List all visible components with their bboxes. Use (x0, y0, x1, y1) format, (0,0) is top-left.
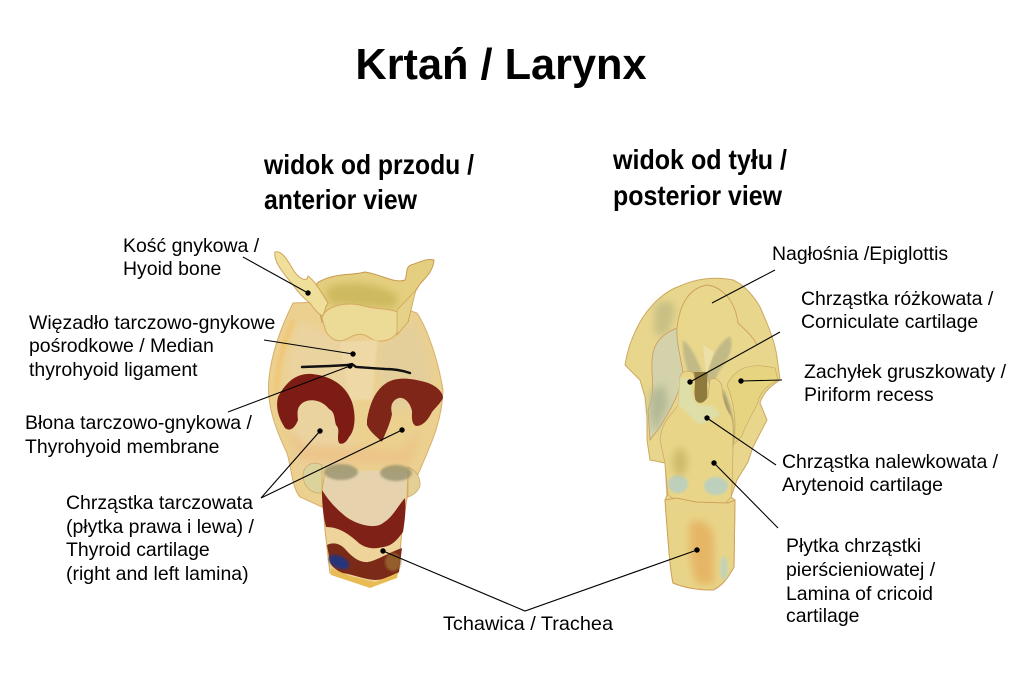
label: thyroid cartilage: (right and left lamina) (66, 563, 249, 585)
cricoid and trachea (322, 464, 412, 588)
epiglottis (678, 285, 757, 352)
illustration: anterior larynx (268, 252, 443, 588)
arytenoid and cricoid upper body (660, 371, 733, 504)
left fold region (648, 328, 683, 440)
piriform recess (727, 366, 778, 445)
heading: posterior view: widok od tyłu / (612, 144, 787, 175)
heading: posterior view (612, 144, 787, 211)
illustration: posterior larynx (625, 278, 780, 590)
tracheal band: upper (322, 490, 405, 548)
thyroid lower horn left (303, 463, 322, 493)
leader lines (228, 257, 782, 611)
label: thyrohyoid membrane: Thyrohyoid membrane (25, 436, 219, 458)
label: thyroid cartilage (66, 492, 255, 585)
label: lamina of cricoid cartilage (786, 535, 936, 627)
heading: anterior view: anterior view (264, 184, 418, 215)
label: median thyrohyoid ligament: thyrohyoid ligament (29, 359, 198, 381)
thyrohyoid membrane: left (277, 374, 355, 444)
heading: anterior view (263, 149, 474, 215)
label: arytenoid cartilage: Chrząstka nalewkowata / (782, 451, 999, 473)
title: Krtań / Larynx (355, 41, 647, 89)
label: median thyrohyoid ligament: pośrodkowe / Median (29, 335, 214, 357)
label: lamina of cricoid cartilage: cartilage (786, 605, 859, 627)
label: piriform recess (804, 361, 1007, 406)
label: hyoid bone (123, 235, 260, 280)
dark glottic opening (694, 372, 708, 403)
label: lamina of cricoid cartilage: Płytka chrząstki (786, 535, 921, 557)
label: thyroid cartilage: Chrząstka tarczowata (66, 492, 253, 514)
label: piriform recess: Piriform recess (804, 384, 934, 406)
label: corniculate cartilage (801, 288, 994, 333)
label: corniculate cartilage: Chrząstka różkowata / (801, 288, 994, 310)
heading: posterior view: posterior view (613, 180, 783, 211)
label: corniculate cartilage: Corniculate cartilage (801, 311, 978, 333)
label: hyoid bone: Kość gnykowa / (123, 235, 260, 257)
outer silhouette (625, 278, 780, 590)
label: epiglottis: Nagłośnia /Epiglottis (772, 243, 948, 265)
label: trachea: Tchawica / Trachea (443, 613, 613, 635)
cricoid lamina (665, 498, 735, 590)
label: thyroid cartilage: (płytka prawa i lewa) / (66, 516, 255, 538)
label: median thyrohyoid ligament (29, 312, 275, 381)
label: hyoid bone: Hyoid bone (123, 258, 221, 280)
median thyrohyoid ligament (340, 340, 378, 400)
label: arytenoid cartilage: Arytenoid cartilage (782, 474, 943, 496)
corniculate folds (683, 336, 732, 385)
anchor dots (305, 290, 744, 554)
thyroid cartilage (268, 300, 443, 507)
dome shading (654, 301, 675, 335)
hyoid bone (275, 252, 434, 341)
label: median thyrohyoid ligament: Więzadło tarczowo-gnykowe (29, 312, 275, 334)
label: lamina of cricoid cartilage: Lamina of cricoid (786, 583, 933, 605)
tracheal band: lower (327, 543, 402, 580)
label: arytenoid cartilage (782, 451, 999, 496)
label: thyrohyoid membrane: Błona tarczowo-gnykowa / (25, 412, 252, 434)
label: lamina of cricoid cartilage: pierścieniowatej / (786, 559, 936, 581)
thyrohyoid membrane: right (367, 379, 443, 442)
blue-grey highlights (668, 475, 688, 493)
label: piriform recess: Zachyłek gruszkowaty / (804, 361, 1007, 383)
thyroid lower horn right (408, 467, 420, 497)
label: thyroid cartilage: Thyroid cartilage (66, 539, 210, 561)
heading: anterior view: widok od przodu / (263, 149, 474, 180)
label: thyrohyoid membrane (25, 412, 252, 458)
ligament black line (302, 364, 410, 373)
